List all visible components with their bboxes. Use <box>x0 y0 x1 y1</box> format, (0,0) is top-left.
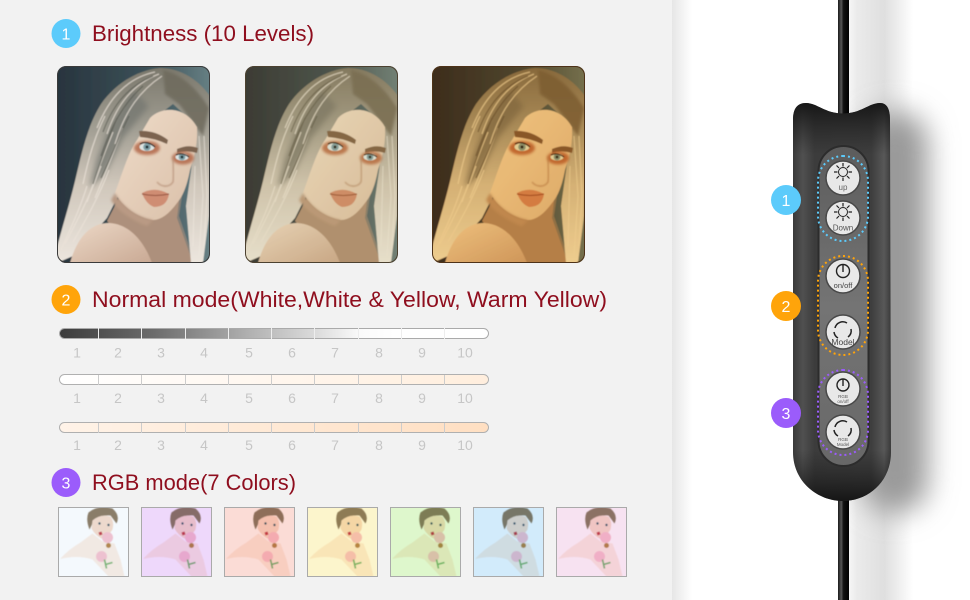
level bar: warm yellow: 10 <box>457 437 473 453</box>
level bar: white brightness <box>60 328 488 360</box>
button: brightness down: Down <box>833 224 853 232</box>
level bar: white brightness: 4 <box>200 344 208 360</box>
level bar: warm yellow: 9 <box>418 437 426 453</box>
dotted outline: normal mode buttons <box>818 256 868 355</box>
level bar: white and yellow: 3 <box>157 390 165 406</box>
level bar: white and yellow: 4 <box>200 390 208 406</box>
callout 3 <box>771 398 801 428</box>
button: RGB model <box>826 415 860 449</box>
level bar: warm yellow <box>60 422 488 453</box>
cable <box>838 0 849 600</box>
colour thumbnail: pink <box>556 507 626 576</box>
level bar: white and yellow: 7 <box>331 390 339 406</box>
button: RGB on/off <box>826 372 860 406</box>
level bar: warm yellow: 4 <box>200 437 208 453</box>
button: on/off: on/off <box>834 281 853 290</box>
button: model: Model <box>831 337 855 347</box>
photo: neutral brightness <box>245 66 398 263</box>
badge 1 <box>52 19 80 48</box>
level bar: warm yellow: 6 <box>288 437 296 453</box>
heading: brightness: Brightness (10 Levels) <box>92 21 314 46</box>
callout 2 <box>771 291 801 321</box>
button: brightness down <box>826 201 860 235</box>
level bar: warm yellow: 7 <box>331 437 339 453</box>
dotted outline: brightness buttons <box>818 156 868 241</box>
level bar: white and yellow <box>60 374 488 406</box>
button: RGB on/off: on/off <box>837 399 849 404</box>
photo: cool brightness <box>57 66 210 263</box>
badge 2 <box>52 285 80 314</box>
badge 3 <box>52 468 80 497</box>
button: on/off <box>826 259 860 293</box>
callout 1: 1 <box>782 193 791 210</box>
level bar: white and yellow: 10 <box>457 390 473 406</box>
level bar: white brightness: 10 <box>457 344 473 360</box>
colour thumbnail: yellow <box>308 507 378 576</box>
callout 2: 2 <box>782 299 791 316</box>
level bar: white brightness: 5 <box>245 344 253 360</box>
heading: RGB mode: RGB mode(7 Colors) <box>92 470 296 495</box>
shadow on the edge of the white panel <box>672 0 692 600</box>
level bar: warm yellow: 5 <box>245 437 253 453</box>
level bar: white and yellow: 5 <box>245 390 253 406</box>
button: RGB model: RGB <box>838 437 848 442</box>
background: left grey panel <box>0 0 672 600</box>
heading: normal mode: Normal mode(White,White & Yellow, Warm Yellow) <box>92 287 607 312</box>
level bar: white brightness: 6 <box>288 344 296 360</box>
remote control product <box>771 0 928 600</box>
badge 1: 1 <box>62 26 71 44</box>
button: model <box>826 315 860 349</box>
normal mode section <box>52 285 607 453</box>
callout 1 <box>771 185 801 215</box>
button: RGB on/off: RGB <box>838 394 848 399</box>
colour thumbnail: red <box>224 507 294 576</box>
badge 3: 3 <box>62 476 71 492</box>
button: brightness up <box>826 161 860 195</box>
colour thumbnail: green <box>390 507 460 576</box>
level bar: white brightness: 2 <box>114 344 122 360</box>
brightness section <box>52 19 585 263</box>
level bar: white and yellow: 2 <box>114 390 122 406</box>
device shadow <box>862 112 928 512</box>
level bar: white brightness: 9 <box>418 344 426 360</box>
RGB mode section <box>52 468 626 576</box>
level bar: white and yellow: 9 <box>418 390 426 406</box>
callout 3: 3 <box>782 406 791 423</box>
colour thumbnail: white <box>58 507 128 576</box>
level bar: white and yellow: 8 <box>375 390 383 406</box>
level bar: white brightness: 3 <box>157 344 165 360</box>
controller body <box>793 103 891 501</box>
level bar: white and yellow: 6 <box>288 390 296 406</box>
photo: warm brightness <box>432 66 585 263</box>
level bar: warm yellow: 8 <box>375 437 383 453</box>
badge 2: 2 <box>62 292 71 310</box>
level bar: white brightness: 8 <box>375 344 383 360</box>
colour thumbnail: blue <box>474 507 544 576</box>
level bar: warm yellow: 1 <box>73 437 81 453</box>
cable shadow bands <box>849 0 913 600</box>
button: RGB model: Model <box>837 442 849 447</box>
dotted outline: RGB buttons <box>818 370 868 455</box>
button panel <box>818 146 868 466</box>
level bar: white brightness: 7 <box>331 344 339 360</box>
colour thumbnail: purple <box>142 507 212 576</box>
button: brightness up: up <box>839 183 848 192</box>
level bar: white and yellow: 1 <box>73 390 81 406</box>
level bar: warm yellow: 3 <box>157 437 165 453</box>
level bar: warm yellow: 2 <box>114 437 122 453</box>
level bar: white brightness: 1 <box>73 344 81 360</box>
